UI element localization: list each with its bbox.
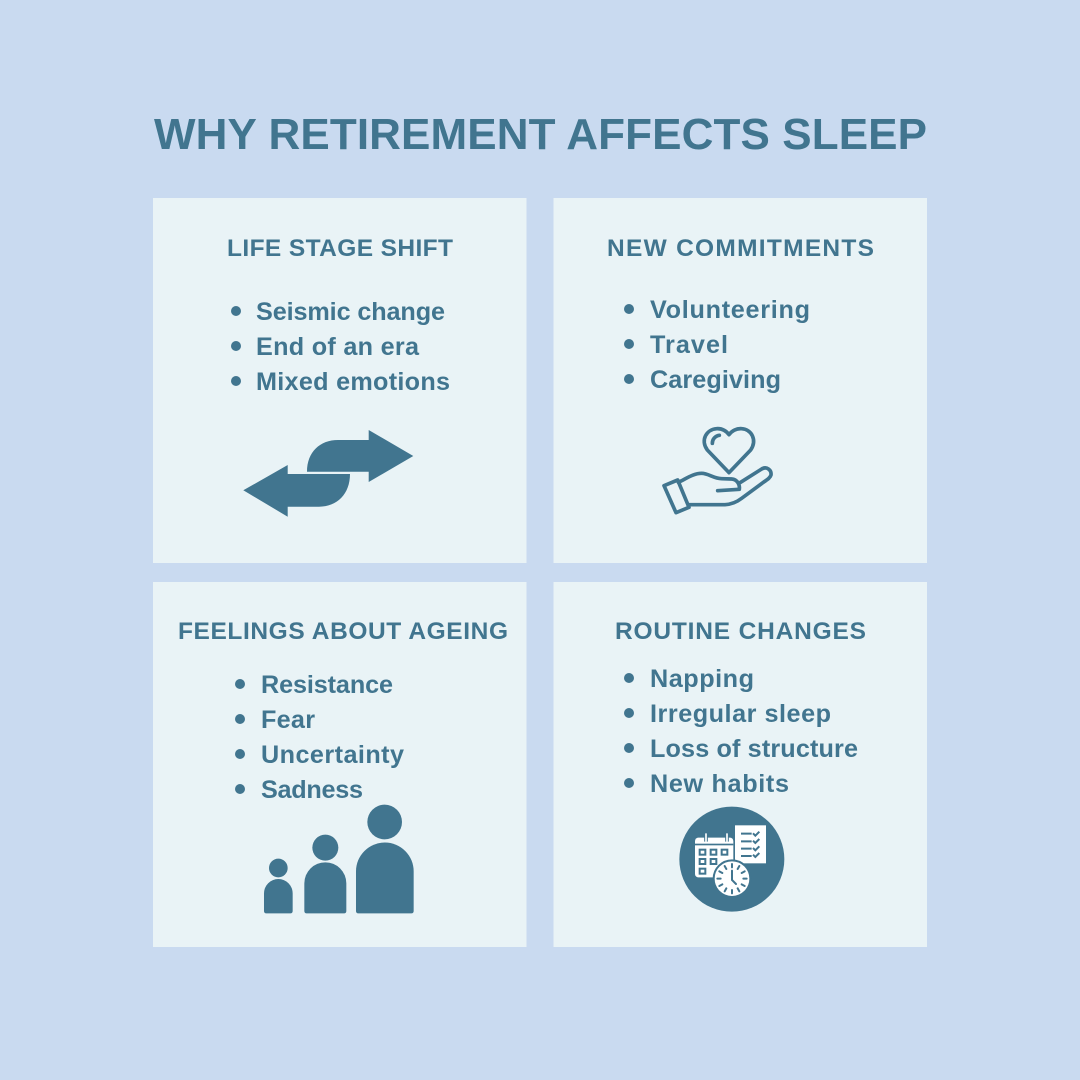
list: routine changes: Loss of structure bbox=[650, 735, 858, 763]
icon: three people growing bbox=[264, 805, 414, 913]
panel: life stage shift bbox=[153, 198, 526, 563]
list: new commitments bbox=[624, 296, 810, 394]
heading: routine changes: ROUTINE CHANGES bbox=[615, 618, 866, 645]
heading: life stage shift: LIFE STAGE SHIFT bbox=[227, 235, 453, 262]
list: routine changes: New habits bbox=[650, 770, 789, 798]
panel: routine changes bbox=[554, 582, 927, 947]
list: new commitments: Volunteering bbox=[650, 296, 810, 324]
list: routine changes: Napping bbox=[650, 665, 754, 693]
list: life stage shift: End of an era bbox=[256, 333, 420, 361]
heading: feelings about ageing: FEELINGS ABOUT AGEING bbox=[178, 618, 508, 645]
list: feelings about ageing: Sadness bbox=[261, 776, 363, 804]
list: new commitments: Travel bbox=[650, 331, 728, 359]
list: routine changes: Irregular sleep bbox=[650, 700, 831, 728]
list: life stage shift: Mixed emotions bbox=[256, 368, 450, 396]
title: WHY RETIREMENT AFFECTS SLEEP bbox=[154, 110, 927, 159]
list: routine changes bbox=[624, 665, 858, 798]
panel: feelings about ageing bbox=[153, 582, 526, 947]
list: new commitments: Caregiving bbox=[650, 366, 781, 394]
heading: new commitments: NEW COMMITMENTS bbox=[607, 235, 874, 262]
list: feelings about ageing: Resistance bbox=[261, 671, 393, 699]
panel: new commitments bbox=[554, 198, 927, 563]
icon: opposing arrows bbox=[243, 430, 413, 517]
list: feelings about ageing: Fear bbox=[261, 706, 315, 734]
list: feelings about ageing: Uncertainty bbox=[261, 741, 404, 769]
icon: calendar, checklist and clock bbox=[679, 807, 784, 912]
list: life stage shift bbox=[231, 298, 450, 396]
list: life stage shift: Seismic change bbox=[256, 298, 445, 326]
list: feelings about ageing bbox=[235, 671, 404, 804]
icon: hand holding heart bbox=[664, 429, 771, 513]
